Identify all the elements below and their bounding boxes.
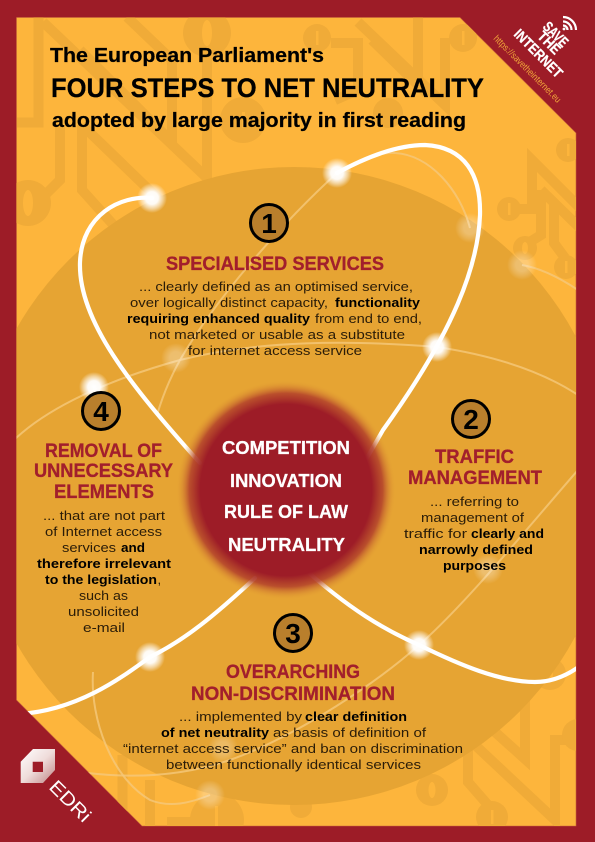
title: adopted by large majority in first reading bbox=[52, 110, 466, 132]
orbit lines bbox=[14, 145, 580, 804]
number badge 1: 1 bbox=[261, 208, 277, 239]
icon: wifi signal bbox=[563, 17, 576, 30]
body text 1: from end to end, bbox=[315, 311, 422, 326]
body text 4: unsolicited bbox=[68, 604, 139, 619]
body text 1: requiring enhanced quality bbox=[127, 311, 311, 326]
central values text: INNOVATION bbox=[230, 471, 342, 491]
body text 2: purposes bbox=[443, 558, 506, 573]
body text 3 bbox=[123, 709, 463, 772]
body text 3: “internet access service” and ban on discrimination bbox=[123, 741, 463, 756]
glowing nodes bbox=[79, 158, 537, 810]
body text 4: such as bbox=[79, 588, 129, 603]
body text 3: clear definition bbox=[305, 709, 407, 724]
heading 3: OVERARCHING bbox=[226, 662, 360, 683]
step 3: overarching non-discrimination bbox=[123, 614, 463, 772]
body text 4: e-mail bbox=[83, 620, 125, 635]
body text 3: ... implemented by bbox=[179, 709, 303, 724]
body text 2: management of bbox=[421, 510, 524, 525]
heading 4: ELEMENTS bbox=[54, 482, 154, 503]
central values text: NEUTRALITY bbox=[228, 535, 345, 555]
heading 3 bbox=[191, 662, 395, 705]
step 1: specialised services bbox=[127, 204, 422, 358]
title: FOUR STEPS TO NET NEUTRALITY bbox=[51, 73, 484, 103]
body text 1 bbox=[127, 279, 422, 358]
central values text bbox=[222, 438, 350, 555]
body text 4: services bbox=[62, 540, 117, 555]
title: The European Parliament's bbox=[50, 44, 324, 67]
body text 3: between functionally identical services bbox=[166, 757, 422, 772]
logo: Save the Internet: https://savetheinternet.eu bbox=[491, 33, 563, 105]
logo: Save the Internet: THE bbox=[534, 29, 564, 58]
heading 2: TRAFFIC bbox=[435, 447, 514, 468]
logo: EDRi bbox=[21, 749, 95, 827]
body text 4: to the legislation bbox=[45, 572, 157, 587]
number badge 4: 4 bbox=[93, 396, 109, 427]
large background circle bbox=[0, 167, 595, 805]
body text 1: ... clearly defined as an optimised service, bbox=[139, 279, 413, 294]
central values text: RULE OF LAW bbox=[224, 502, 348, 522]
central values text: COMPETITION bbox=[222, 438, 350, 458]
body text 3: of net neutrality bbox=[161, 725, 270, 740]
central red circle bbox=[176, 380, 396, 600]
title bbox=[50, 44, 484, 132]
body text 1: for internet access service bbox=[188, 343, 362, 358]
heading 4: UNNECESSARY bbox=[34, 461, 173, 482]
body text 2 bbox=[404, 494, 544, 573]
body text 4 bbox=[37, 508, 172, 635]
number badge 4 bbox=[82, 392, 120, 430]
number badge 3 bbox=[274, 614, 312, 652]
heading 2 bbox=[408, 447, 542, 489]
body text 2: ... referring to bbox=[430, 494, 519, 509]
faint orbit lines bbox=[14, 153, 578, 804]
body text 1: over logically distinct capacity, bbox=[130, 295, 328, 310]
body text 2: clearly and bbox=[471, 526, 544, 541]
body text 2: traffic for bbox=[404, 526, 468, 541]
bright white orbit lines bbox=[20, 145, 580, 714]
heading 2: MANAGEMENT bbox=[408, 468, 542, 489]
step 4: removal of unnecessary elements bbox=[34, 392, 173, 635]
number badge 2: 2 bbox=[463, 404, 479, 435]
body text 4: , bbox=[158, 572, 161, 587]
body text 3: as basis of definition of bbox=[273, 725, 426, 740]
step 2: traffic management bbox=[404, 400, 544, 573]
body text 2: narrowly defined bbox=[419, 542, 533, 557]
number badge 3: 3 bbox=[285, 618, 301, 649]
heading 1: SPECIALISED SERVICES bbox=[166, 254, 384, 275]
heading 4 bbox=[34, 441, 173, 503]
body text 1: functionality bbox=[335, 295, 421, 310]
body text 4: therefore irrelevant bbox=[37, 556, 172, 571]
body text 4: and bbox=[121, 540, 145, 555]
logo: Save the Internet: SAVE bbox=[539, 19, 571, 51]
logo: Save the Internet: INTERNET bbox=[510, 27, 565, 82]
body text 4: of Internet access bbox=[45, 524, 163, 539]
heading 3: NON-DISCRIMINATION bbox=[191, 684, 395, 705]
heading 4: REMOVAL OF bbox=[45, 441, 162, 462]
body text 4: ... that are not part bbox=[43, 508, 165, 523]
number badge 1 bbox=[250, 204, 288, 242]
icon: EDRi cube bbox=[21, 749, 55, 783]
logo: EDRi: EDRi bbox=[44, 777, 95, 827]
body text 1: not marketed or usable as a substitute bbox=[149, 327, 405, 342]
number badge 2 bbox=[452, 400, 490, 438]
